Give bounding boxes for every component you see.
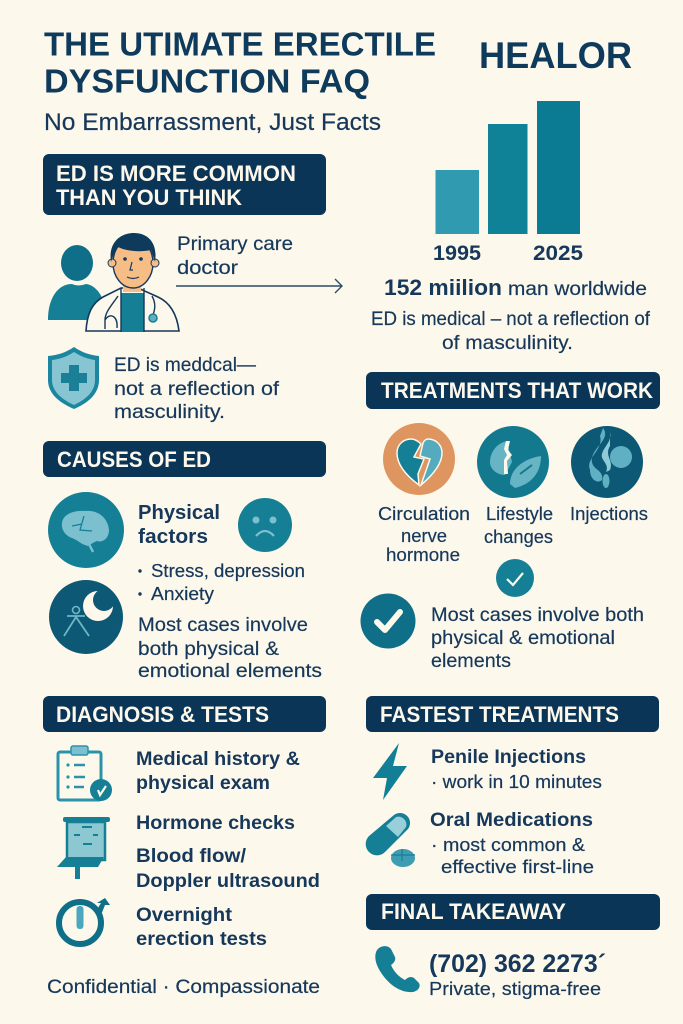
icon: pills — [366, 813, 415, 867]
title: DYSFUNCTION FAQ — [44, 62, 370, 100]
text: most cases — [138, 614, 322, 682]
bar label 2025: 2025 — [533, 242, 583, 265]
statistic: 152 miilion — [384, 275, 502, 300]
brand logo text: HEALOR — [479, 35, 632, 76]
text: most cases — [431, 604, 644, 672]
bar label 1995: 1995 — [433, 242, 481, 265]
label: primary care doctor: Primary care — [177, 233, 293, 255]
statistic — [384, 275, 647, 300]
label: injections: Injections — [570, 503, 648, 524]
heading bar — [43, 696, 326, 732]
bullet list: Anxiety — [151, 583, 215, 604]
heading bar — [43, 441, 326, 477]
icon: lightning — [373, 743, 407, 800]
heading bar — [43, 154, 326, 215]
text: penile injections: · work in 10 minutes — [431, 771, 602, 792]
heading text: TREATMENTS THAT WORK — [381, 378, 653, 403]
title: THE UTIMATE ERECTILE — [44, 26, 436, 62]
text: hormone checks: Hormone checks — [136, 812, 295, 834]
text: blood flow: Doppler ultrasound — [136, 870, 320, 892]
panel: diagnosis and tests — [43, 696, 326, 998]
icon: large check — [360, 594, 416, 648]
panel: ED is more common — [43, 154, 342, 423]
icon: lab device — [57, 817, 110, 879]
panel: final takeaway — [366, 894, 660, 999]
text: oral medications: effective first-line — [441, 856, 594, 877]
icon: timer — [59, 898, 110, 944]
icon: phone — [375, 946, 420, 992]
text: blood flow — [136, 845, 320, 892]
text: physical factors: factors — [138, 526, 208, 548]
subtitle: No Embarrassment, Just Facts — [44, 109, 381, 136]
icon: patient — [48, 245, 103, 320]
bullet list: Stress, depression — [151, 560, 305, 581]
callout text: ED is meddcal— — [114, 354, 256, 376]
icon: small check — [496, 559, 534, 597]
label: circulation nerve hormone: nerve — [401, 526, 447, 546]
text: medical history: physical exam — [136, 772, 270, 794]
panel: treatments that work — [360, 372, 660, 672]
text: private: Private, stigma-free — [429, 978, 601, 999]
heading bar — [366, 696, 659, 732]
text: most cases: physical & emotional — [431, 627, 615, 649]
bullet list — [138, 560, 305, 604]
medical statement: ED is medical – not a reflection of — [371, 308, 651, 330]
label: primary care doctor: doctor — [177, 257, 239, 279]
text: physical factors: Physical — [138, 502, 220, 524]
statistic: man worldwide — [508, 279, 647, 300]
text: medical history: Medical history & — [136, 748, 300, 770]
icon: sad face — [238, 498, 292, 552]
text: blood flow: Blood flow/ — [136, 845, 247, 867]
heading text — [56, 161, 296, 210]
bar chart — [433, 101, 583, 265]
footer tagline: Confidential · Compassionate — [47, 977, 320, 998]
arrow — [176, 279, 342, 293]
callout text: masculinity. — [114, 401, 225, 423]
callout text: not a reflection of — [114, 378, 280, 400]
text: oral medications: Oral Medications — [430, 810, 593, 831]
label: lifestyle changes: changes — [484, 526, 553, 547]
heading text: ED IS MORE COMMON — [56, 161, 296, 186]
text: most cases: Most cases involve both — [431, 604, 644, 626]
heading text: FASTEST TREATMENTS — [380, 702, 619, 727]
icon: doctor — [86, 233, 179, 332]
icon: moon and figure — [49, 580, 123, 654]
icon: clipboard — [58, 746, 112, 801]
panel: fastest treatments — [366, 696, 659, 877]
text: most cases: both physical & — [138, 638, 279, 660]
medical statement — [371, 308, 651, 354]
label: circulation nerve hormone — [378, 503, 470, 565]
heading bar — [366, 372, 660, 409]
label: lifestyle changes — [484, 503, 553, 547]
text: most cases: elements — [431, 650, 511, 672]
text: overnight tests: erection tests — [136, 928, 267, 950]
heading bar — [366, 894, 660, 930]
panel: causes of ED — [43, 441, 326, 682]
title — [44, 26, 436, 100]
icon: shield — [48, 347, 99, 409]
icon: lifestyle — [477, 426, 549, 498]
heading text: FINAL TAKEAWAY — [381, 899, 566, 924]
icon: brain — [48, 492, 124, 568]
icon: injections — [571, 426, 643, 498]
text: oral medications: · most common & — [431, 834, 586, 855]
label: circulation nerve hormone: Circulation — [378, 503, 470, 524]
heading text: CAUSES OF ED — [57, 447, 211, 472]
label: circulation nerve hormone: hormone — [386, 545, 460, 565]
heading text: THAN YOU THINK — [56, 185, 242, 210]
heading text: DIAGNOSIS & TESTS — [56, 702, 269, 727]
text: penile injections: Penile Injections — [431, 747, 586, 768]
text: most cases: emotional elements — [138, 660, 322, 682]
text: physical factors — [138, 502, 220, 548]
text: overnight tests: Overnight — [136, 904, 233, 926]
phone number: (702) 362 2273´ — [429, 950, 606, 978]
text: oral medications — [430, 810, 594, 877]
text: medical history — [136, 748, 300, 794]
label: primary care doctor — [177, 233, 293, 279]
text: overnight tests — [136, 904, 267, 950]
text: most cases: Most cases involve — [138, 614, 308, 636]
icon: broken heart — [383, 423, 455, 495]
text: penile injections — [431, 747, 602, 792]
label: lifestyle changes: Lifestyle — [486, 503, 553, 524]
callout text — [114, 354, 280, 423]
medical statement: of masculinity. — [442, 332, 573, 354]
